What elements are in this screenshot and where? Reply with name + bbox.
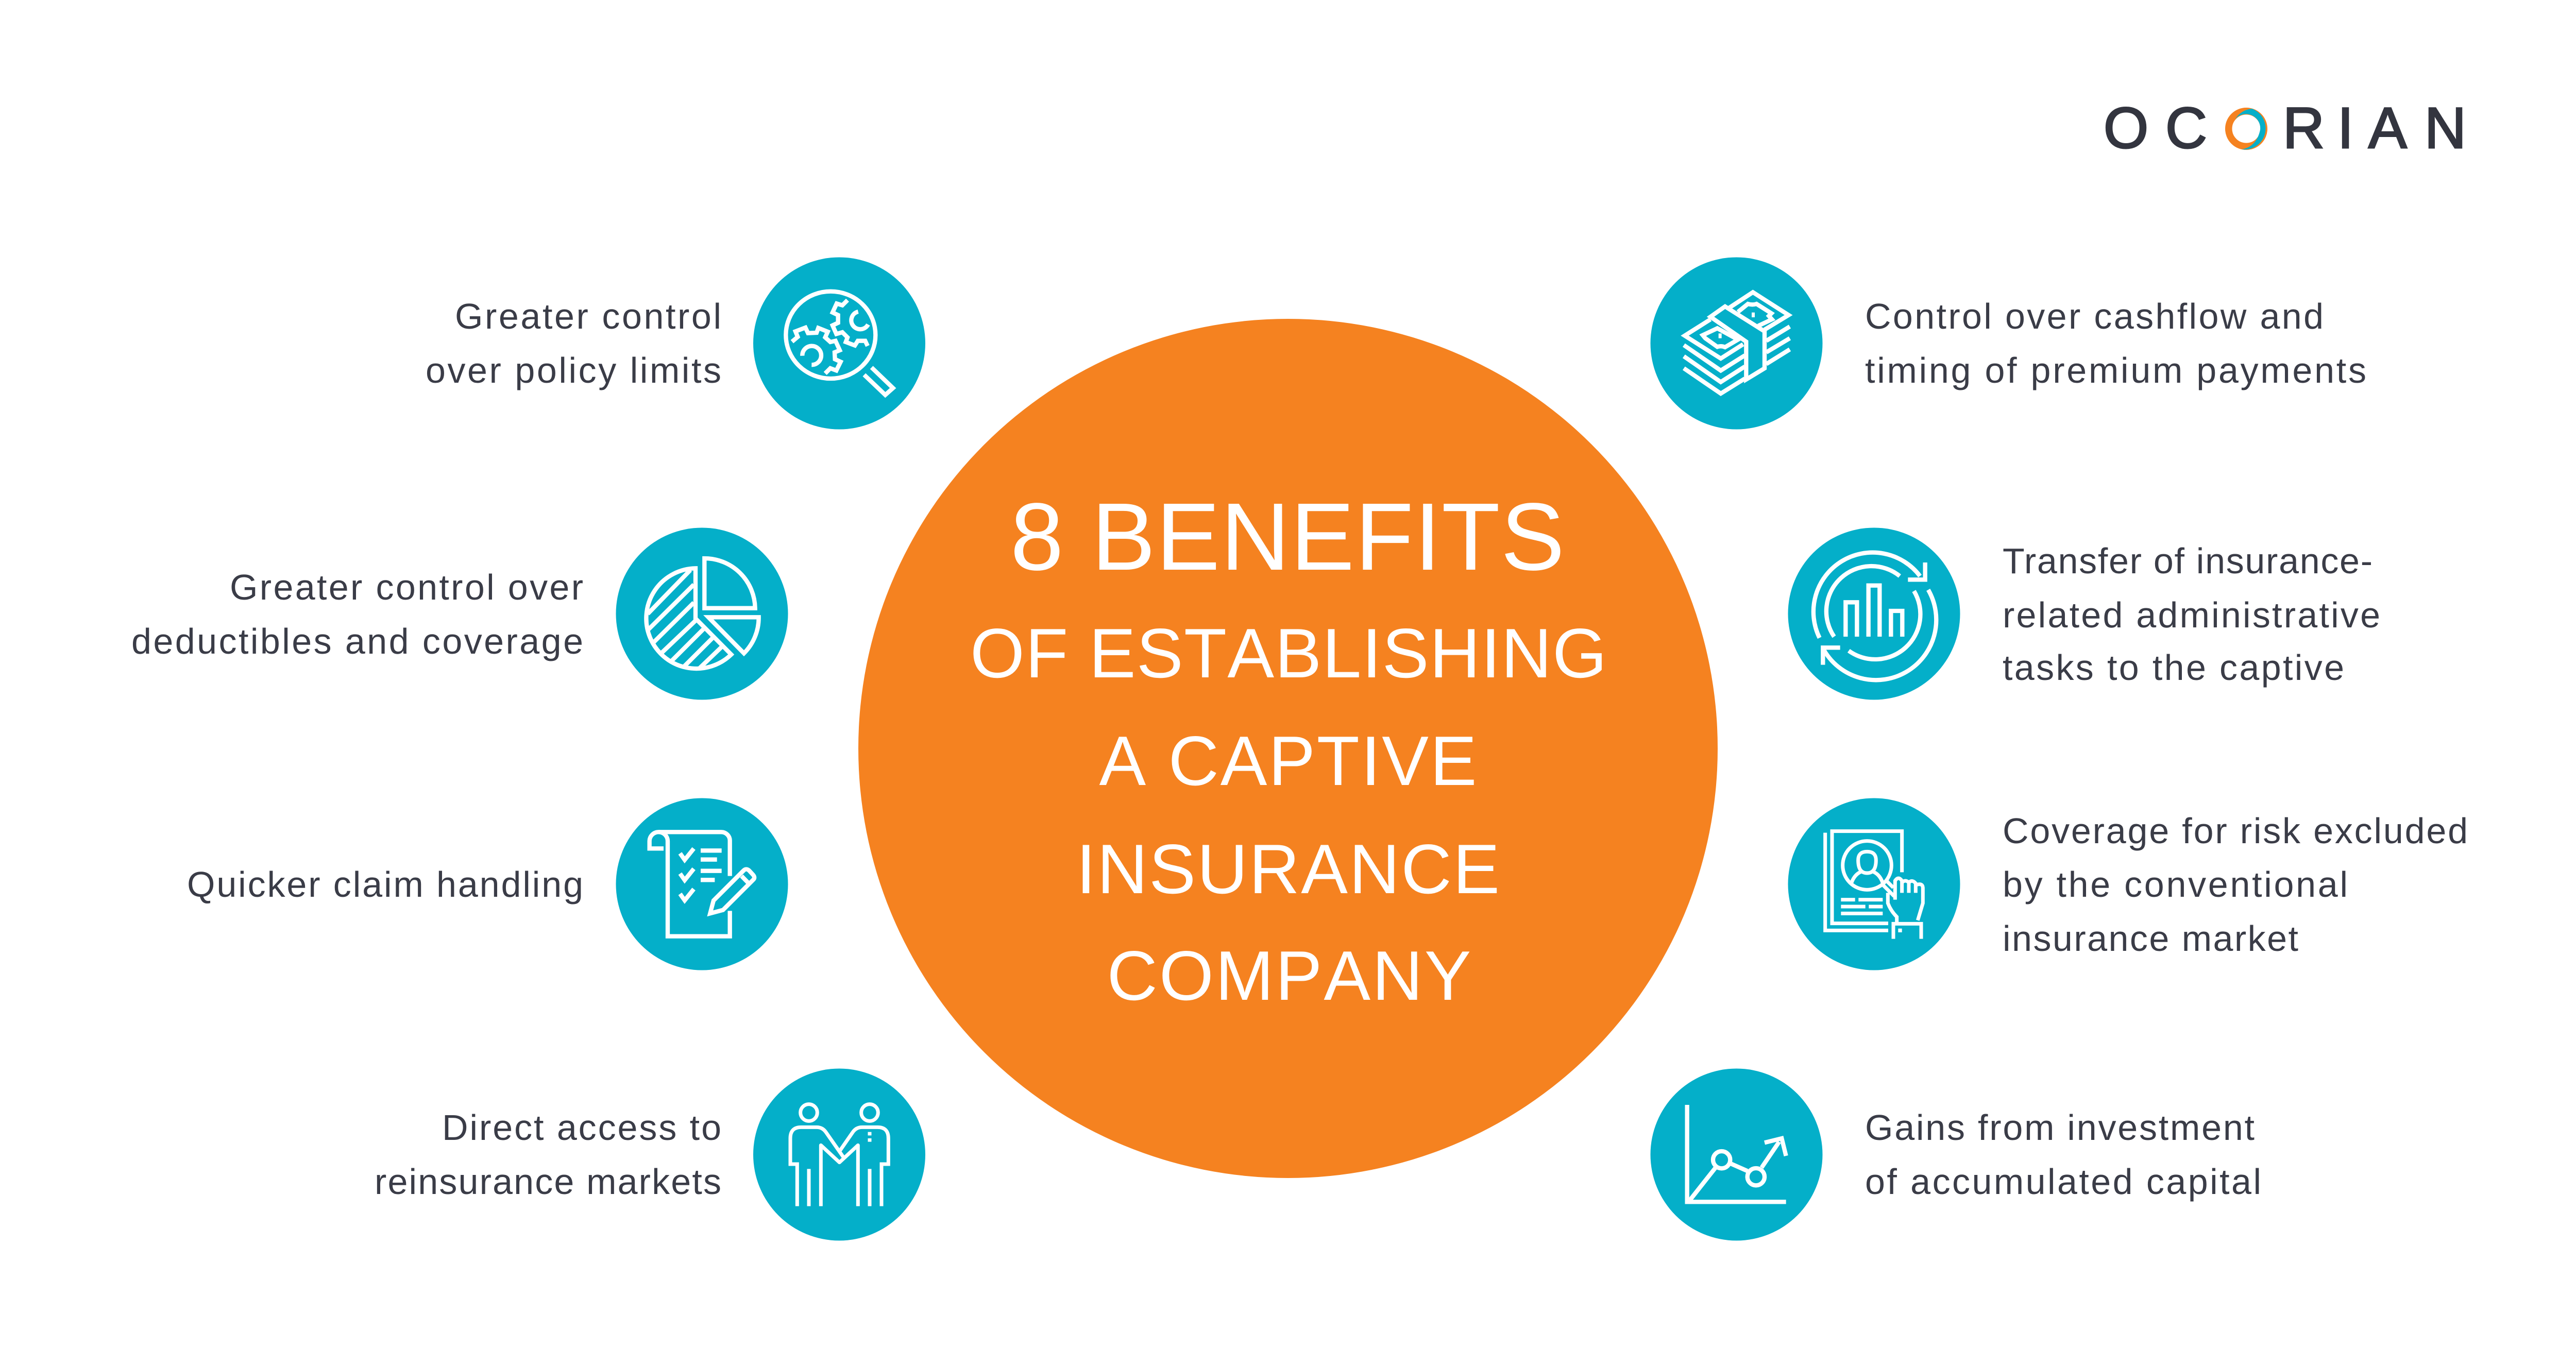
logo: Ocorian: I [2337, 96, 2353, 160]
logo: Ocorian: C [2165, 96, 2207, 160]
icon: rising line chart [1687, 1105, 1786, 1202]
icon: magnifier with gears [786, 292, 893, 395]
text: cashflow [1865, 296, 2366, 390]
text: policy limits: Greater control [455, 296, 721, 336]
text: excluded risk [2003, 811, 2468, 959]
benefit: policy limits [426, 258, 925, 430]
central orange circle with title [858, 319, 1718, 1178]
benefit: reinsurance markets [375, 1068, 925, 1240]
text: claim handling: Quicker claim handling [187, 864, 583, 905]
benefit: administrative tasks [1788, 527, 2380, 699]
text: administrative tasks: related administrative [2003, 595, 2380, 635]
text: deductibles and coverage: Greater control over [230, 567, 583, 607]
title: 8 BENEFITS [1010, 484, 1565, 590]
benefit: claim handling [187, 798, 788, 970]
text: investment gains: Gains from investment [1865, 1107, 2255, 1148]
logo: Ocorian: A [2368, 96, 2407, 160]
text: excluded risk: Coverage for risk excluded [2003, 811, 2468, 851]
logo: Ocorian: O [2104, 96, 2148, 160]
logo: Ocorian: R [2283, 96, 2325, 160]
text: deductibles and coverage [131, 567, 583, 661]
icon: checklist and pencil [650, 832, 754, 936]
text: cashflow: timing of premium payments [1865, 350, 2366, 390]
benefit: excluded risk [1788, 798, 2468, 970]
text: cashflow: Control over cashflow and [1865, 296, 2324, 336]
title: COMPANY [1107, 936, 1471, 1015]
text: reinsurance markets: Direct access to [442, 1107, 721, 1148]
text: reinsurance markets: reinsurance markets [375, 1162, 721, 1202]
text: administrative tasks: Transfer of insurance- [2003, 541, 2372, 581]
text: administrative tasks: tasks to the captive [2003, 647, 2344, 688]
text: reinsurance markets [375, 1107, 721, 1202]
text: excluded risk: by the conventional [2003, 864, 2348, 905]
benefit: deductibles and coverage [131, 527, 788, 699]
icon: bar chart with cycle arrows [1814, 553, 1936, 680]
text: excluded risk: insurance market [2003, 918, 2298, 959]
text: investment gains: of accumulated capital [1865, 1162, 2261, 1202]
text: administrative tasks [2003, 541, 2380, 688]
title [970, 484, 1607, 1015]
text: policy limits [426, 296, 721, 390]
logo: Ocorian [2104, 96, 2466, 160]
icon: stack of banknotes [1684, 292, 1790, 394]
logo: Ocorian: N [2425, 96, 2466, 160]
benefit: investment gains [1651, 1068, 2261, 1240]
title: A CAPTIVE [1099, 722, 1477, 800]
benefit: cashflow [1651, 258, 2366, 430]
title: INSURANCE [1076, 830, 1500, 908]
text: investment gains [1865, 1107, 2261, 1202]
text: deductibles and coverage: deductibles and coverage [131, 621, 583, 661]
icon: pie chart [646, 558, 759, 669]
text: policy limits: over policy limits [426, 350, 721, 390]
title: OF ESTABLISHING [970, 614, 1607, 692]
icon: two people shaking hands [790, 1104, 888, 1206]
icon: document with magnifier and hand [1825, 831, 1923, 939]
